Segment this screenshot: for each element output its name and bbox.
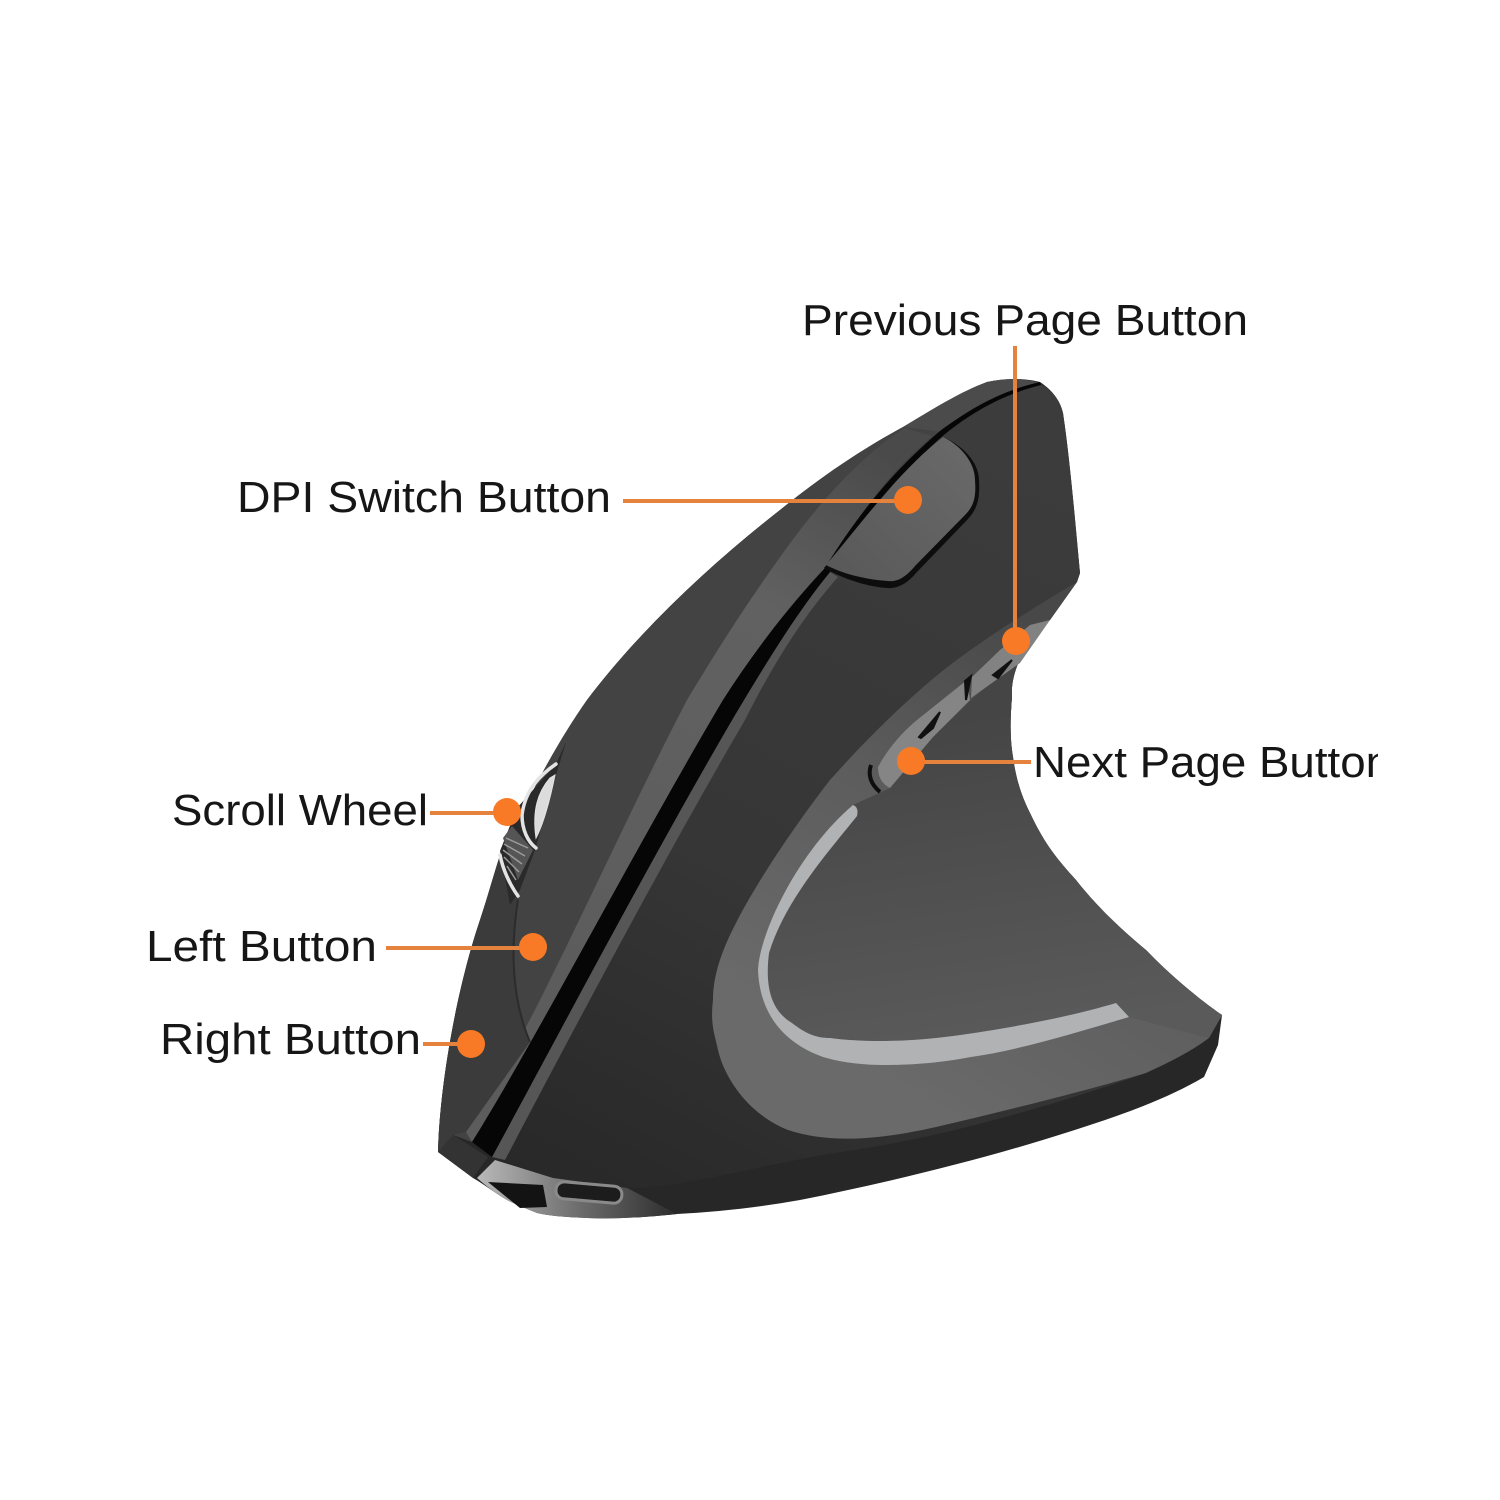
side page buttons — [870, 620, 1050, 792]
marker dot — [897, 747, 925, 775]
wheel tread lines — [503, 838, 528, 880]
button slot marks — [919, 660, 1012, 738]
swoosh surface band — [712, 582, 1222, 1139]
USB port area — [438, 1135, 677, 1218]
mouse illustration — [438, 379, 1222, 1218]
next page button — [878, 680, 970, 788]
left button seam line — [514, 900, 530, 1042]
marker dot — [519, 933, 547, 961]
next button shadow — [870, 765, 880, 792]
label, clipped at right: Next Page Button — [1033, 738, 1391, 787]
callout: Next Page Button — [897, 747, 1378, 786]
marker dot — [493, 798, 521, 826]
marker dot — [1002, 627, 1030, 655]
label: Left Button — [146, 922, 377, 971]
marker dot — [894, 486, 922, 514]
callout: Right Button — [160, 1015, 485, 1064]
infographic: vertical mouse diagram — [150, 304, 1378, 1218]
charging slot — [488, 1182, 547, 1208]
leader line — [386, 946, 533, 950]
inner thumb rest surface — [768, 653, 1222, 1041]
silver port trim — [477, 1160, 677, 1218]
thin highlight right of slit — [492, 572, 838, 1160]
bottom-left corner block — [438, 1135, 488, 1178]
callout: Scroll Wheel — [172, 786, 521, 835]
callout: Previous Page Button — [802, 296, 1248, 655]
leader line — [423, 1042, 471, 1046]
light arc accent strip — [758, 805, 1129, 1065]
callout: Left Button — [146, 922, 547, 971]
label: Previous Page Button — [802, 296, 1248, 345]
scroll wheel — [500, 742, 566, 905]
right face of mouse — [492, 384, 1146, 1188]
leader line — [623, 499, 908, 503]
DPI button cap — [826, 437, 975, 581]
previous page button — [971, 620, 1050, 698]
USB-C port — [555, 1181, 623, 1204]
right button panel — [438, 855, 530, 1152]
label: Right Button — [160, 1015, 421, 1064]
leader line — [911, 760, 1031, 764]
label: DPI Switch Button — [237, 473, 611, 522]
DPI switch button — [824, 437, 979, 588]
wheel highlight arcs — [500, 764, 556, 896]
left surface of mouse — [438, 427, 940, 1152]
wheel slot dark area — [500, 742, 566, 905]
lighter grey ridge beside slit — [466, 428, 932, 1142]
wheel tread — [503, 826, 533, 880]
black centre slit — [472, 382, 1041, 1157]
leader line — [1013, 346, 1017, 641]
top cap of mouse — [903, 379, 1040, 432]
leader line — [430, 811, 507, 815]
label: Scroll Wheel — [172, 786, 428, 835]
mouse body silhouette — [438, 379, 1222, 1218]
DPI button shadow — [824, 437, 979, 588]
callout: DPI Switch Button — [237, 473, 922, 522]
marker dot — [457, 1030, 485, 1058]
